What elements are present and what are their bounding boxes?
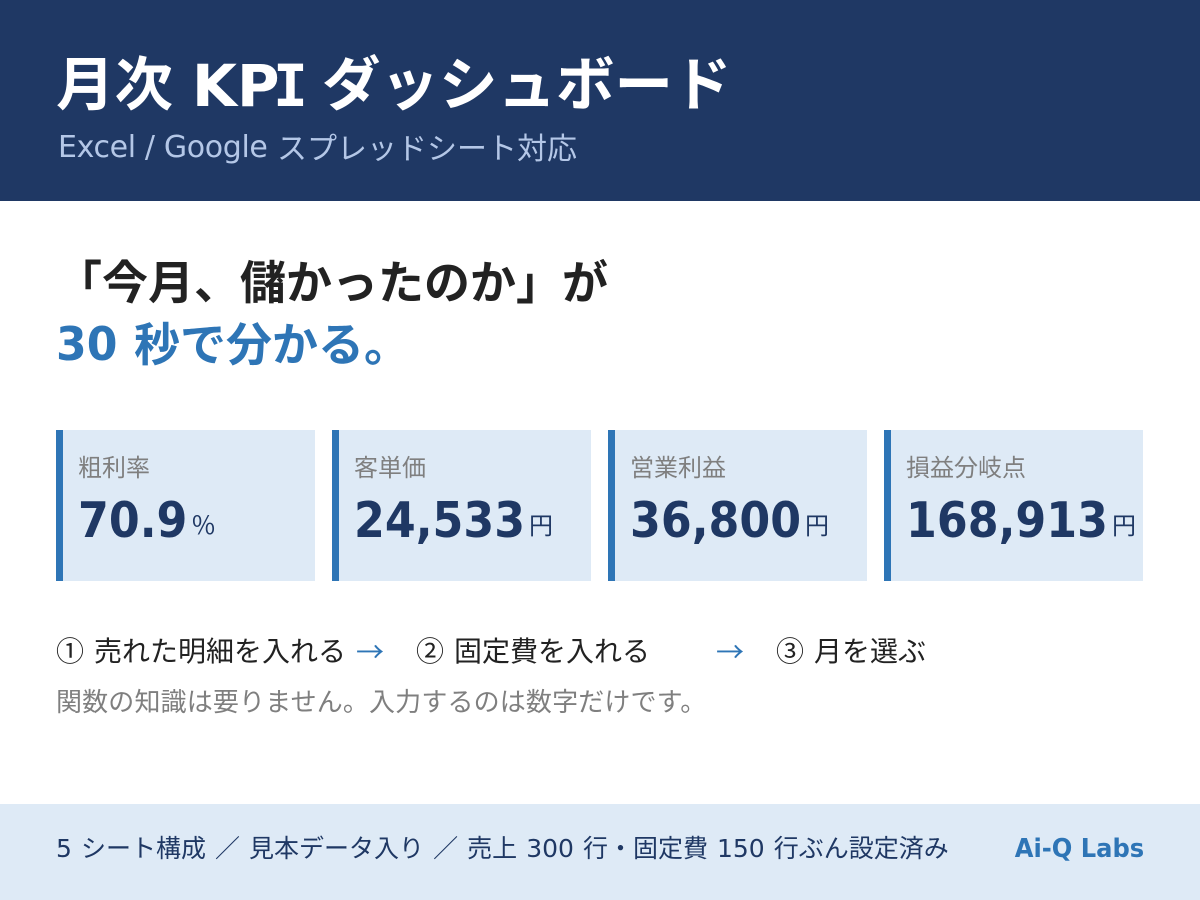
headline line 1: 「今月、儲かったのか」が [56,247,608,313]
steps row [56,630,926,671]
brand: Ai-Q Labs [1015,834,1144,864]
headline line 2: 秒で分かる。 [134,309,410,375]
note: 関数の知識は要りません。入力するのは数字だけです。 [56,682,706,719]
unit: 円 [1112,506,1136,541]
unit: % [192,506,215,542]
headline [56,247,608,375]
KPI card: operating profit [608,430,867,581]
arrow 2: → [716,631,744,671]
unit: 円 [805,506,829,541]
label: 損益分岐点 [906,448,1026,483]
title: KP [192,52,279,120]
subtitle: Excel / Google [58,130,268,165]
headline line 2: 30 [56,317,117,371]
label: 営業利益 [630,448,726,483]
header band [0,0,1200,201]
subtitle [58,124,577,168]
title: 月次 [56,37,173,122]
title: I [273,52,308,120]
KPI card: gross margin [56,430,315,581]
value: 36,800 [630,492,801,549]
step 2: 固定費を入れる [454,630,650,670]
step 1: ① [56,630,84,670]
KPI card: average spend [332,430,591,581]
title: ダッシュボード [322,37,732,122]
footer details: 5 シート構成 ／ 見本データ入り ／ 売上 300 行・固定費 150 行ぶん設定済み [56,834,949,863]
title [56,37,732,122]
unit: 円 [529,506,553,541]
arrow 1: → [356,631,384,671]
step 3: 月を選ぶ [814,630,926,670]
subtitle: スプレッドシート対応 [277,124,577,168]
step 2: ② [416,630,444,670]
value: 70.9 [78,492,187,549]
value: 24,533 [354,492,525,549]
KPI card: break-even point [884,430,1143,581]
footer band [0,804,1200,900]
label: 粗利率 [78,448,150,483]
label: 客単価 [354,448,426,483]
value: 168,913 [906,492,1108,549]
step 3: ③ [776,630,804,670]
step 1: 売れた明細を入れる [94,630,346,670]
